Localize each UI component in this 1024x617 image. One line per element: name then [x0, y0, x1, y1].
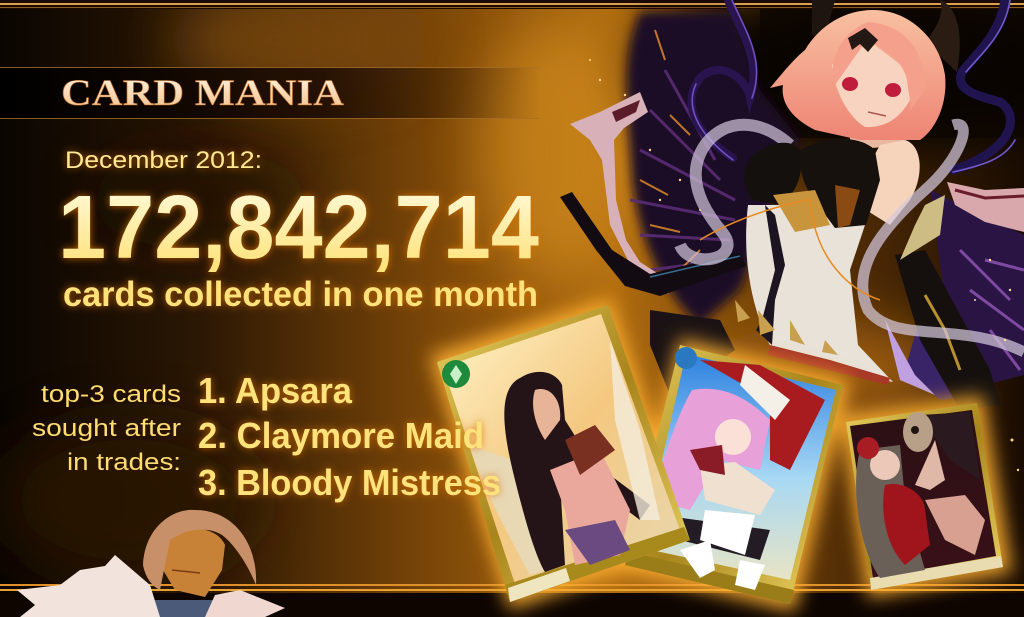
bottom band [0, 584, 1024, 617]
icon: dragon head right [947, 182, 1024, 232]
top band [0, 0, 1024, 9]
top-3 list: 2. Claymore Maid [198, 415, 484, 456]
card glow [430, 298, 1012, 612]
right shoulder and arm [850, 140, 920, 225]
card: Apsara [437, 305, 690, 602]
big number: 172,842,714 [58, 178, 539, 278]
face [832, 38, 910, 127]
orange ribbon [700, 200, 880, 300]
sparkles [589, 59, 1019, 471]
icon: dragon head left [570, 92, 674, 294]
shoulder star ornament [900, 195, 945, 260]
title: CARD MANIA [61, 73, 344, 114]
hair fringe [833, 22, 925, 110]
male character [17, 510, 285, 617]
top-3 list [198, 370, 501, 503]
card: Claymore Maid [625, 345, 843, 604]
top-3 label: top-3 cards [41, 381, 181, 408]
title band [0, 67, 540, 119]
subheading: cards collected in one month [63, 275, 538, 314]
top-3 label: in trades: [67, 449, 181, 476]
gold spikes [735, 300, 838, 355]
dragon wings [627, 12, 1024, 400]
hair [770, 10, 945, 140]
character: dark angel [560, 0, 1024, 410]
pale tendril front [863, 124, 1024, 352]
top-3 list: 1. Apsara [198, 370, 353, 411]
gloved arm [560, 192, 746, 296]
top-3 list: 3. Bloody Mistress [198, 462, 501, 503]
tiara [848, 28, 878, 52]
card: Bloody Mistress [846, 403, 1003, 590]
horns [812, 0, 835, 38]
eyes [842, 77, 858, 91]
dress [746, 205, 893, 382]
top-3 label: sought after [32, 415, 181, 442]
pale tendril behind [680, 125, 790, 259]
gauntlet right arm [895, 250, 1000, 410]
purple tentacles [691, 0, 1015, 172]
neck [850, 115, 905, 150]
dark hair mass under arm [650, 310, 735, 395]
top-3 label [32, 381, 181, 476]
date label: December 2012: [65, 147, 262, 174]
black armor bust [744, 143, 801, 205]
